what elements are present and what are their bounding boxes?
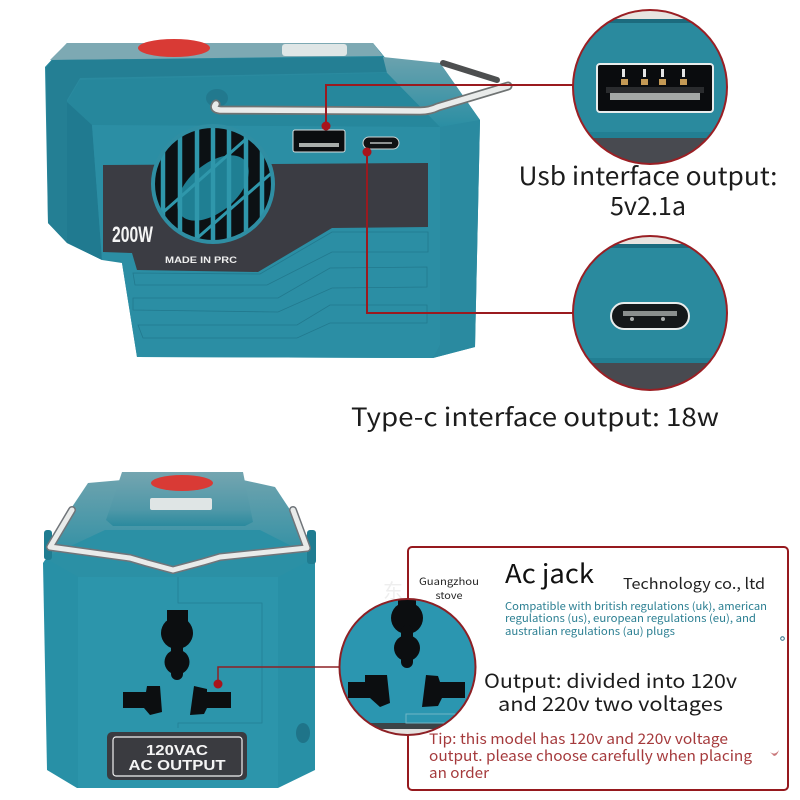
front panel bbox=[78, 577, 278, 788]
white button bbox=[150, 498, 212, 510]
company text: Technology co., ltd bbox=[623, 573, 765, 594]
Type-C caption: Type-c interface output: 18w bbox=[351, 398, 719, 434]
carry handle bbox=[50, 510, 307, 570]
USB-C port bbox=[363, 137, 399, 149]
device: side view with ports bbox=[45, 39, 508, 358]
shop name text: Guangzhou bbox=[419, 573, 479, 588]
Type-C socket detail bbox=[611, 303, 689, 329]
small side hole bbox=[296, 723, 310, 743]
red button bbox=[151, 475, 213, 491]
fan grille bbox=[153, 120, 275, 245]
side knobs bbox=[44, 530, 52, 560]
USB port bbox=[293, 130, 345, 152]
tip text bbox=[429, 728, 752, 783]
USB caption: Usb interface output: bbox=[518, 157, 778, 193]
top cap bbox=[106, 472, 253, 526]
zoom circle: Type-C port bbox=[570, 234, 730, 395]
USB caption bbox=[518, 157, 778, 223]
shop name text bbox=[419, 573, 479, 602]
socket plate outline bbox=[178, 577, 262, 728]
callout line: Type-C bbox=[362, 148, 573, 313]
USB caption: 5v2.1a bbox=[610, 187, 686, 223]
voltage label: AC OUTPUT bbox=[128, 758, 226, 774]
output text: Output: divided into 120v bbox=[484, 665, 737, 694]
compatibility text: regulations (us), european regulations (eu), and bbox=[505, 611, 756, 626]
shop name text: stove bbox=[436, 587, 463, 602]
right top shoulder bbox=[383, 57, 480, 127]
USB socket detail bbox=[597, 64, 713, 112]
top strip bbox=[50, 43, 383, 60]
tip text: Tip: this model has 120v and 220v voltage bbox=[429, 728, 728, 749]
tip text: output. please choose carefully when placing bbox=[429, 745, 752, 766]
AC socket bbox=[123, 610, 231, 715]
callout line: USB bbox=[322, 85, 573, 130]
white button bbox=[282, 44, 347, 56]
device: front view with AC socket bbox=[43, 472, 316, 788]
zoom circle: USB port bbox=[570, 8, 730, 168]
upper bevel bbox=[45, 530, 315, 577]
made in PRC label: MADE IN PRC bbox=[165, 255, 237, 266]
info box bbox=[408, 547, 788, 790]
socket detail bbox=[348, 596, 465, 707]
tip text: an order bbox=[429, 762, 489, 783]
front bevel bbox=[67, 73, 440, 127]
callout line: AC socket bbox=[214, 667, 339, 688]
output text: and 220v two voltages bbox=[498, 688, 723, 717]
carry handle bbox=[206, 63, 508, 111]
voltage label bbox=[107, 732, 247, 780]
dark panel bbox=[103, 163, 428, 272]
left facet bbox=[67, 102, 102, 260]
stray marks bbox=[770, 637, 784, 756]
200W label: 200W bbox=[112, 222, 153, 247]
faint watermark: 东 bbox=[383, 580, 403, 603]
upper shoulder band bbox=[46, 57, 388, 243]
right side bbox=[433, 120, 480, 358]
zoom circle: AC socket bbox=[335, 595, 480, 740]
device body silhouette bbox=[45, 43, 480, 358]
heading: Ac jack: Ac jack bbox=[505, 554, 595, 591]
body bbox=[43, 560, 315, 788]
front face bbox=[92, 125, 440, 358]
voltage label: 120VAC bbox=[146, 743, 209, 759]
red button bbox=[138, 39, 210, 57]
compatibility text: australian regulations (au) plugs bbox=[505, 624, 675, 639]
compatibility text: Compatible with british regulations (uk), american bbox=[505, 599, 767, 614]
output text bbox=[484, 665, 737, 717]
compatibility text bbox=[505, 599, 767, 639]
shoulder bbox=[45, 480, 315, 565]
ribs bbox=[133, 232, 428, 338]
